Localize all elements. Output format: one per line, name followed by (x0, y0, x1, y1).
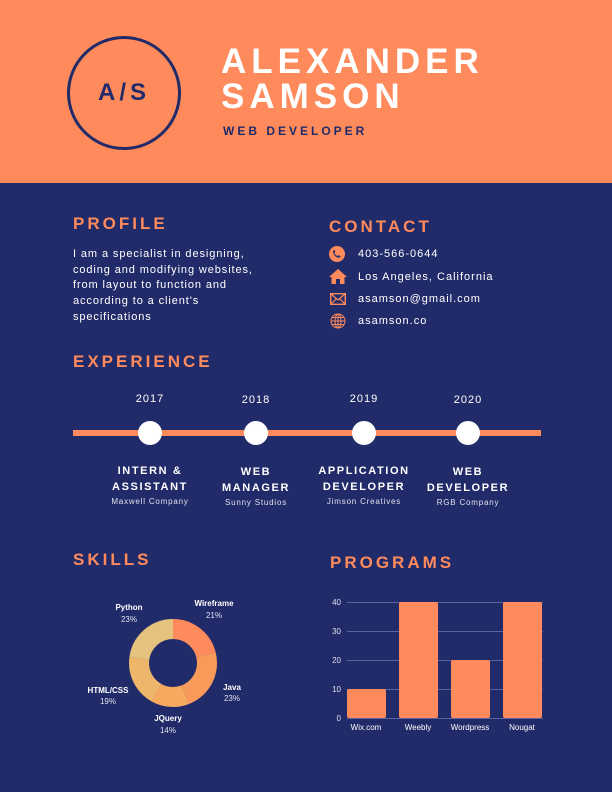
timeline (73, 393, 541, 507)
timeline: 2018 (242, 394, 270, 406)
contact list: asamson.co (358, 315, 427, 327)
bar chart: 20 (332, 656, 342, 665)
donut chart: HTML/CSS (88, 686, 129, 695)
job: web manager: MANAGER (222, 482, 290, 494)
donut chart: Python (115, 603, 143, 612)
job: web manager (222, 466, 290, 507)
profile text: specifications (73, 311, 152, 323)
monogram circle (67, 36, 181, 150)
icon: house (329, 269, 347, 284)
contact list (329, 246, 494, 328)
name title (221, 42, 484, 116)
job title: WEB DEVELOPER (223, 124, 367, 138)
name title: SAMSON (221, 77, 405, 116)
donut chart: Java (223, 683, 241, 692)
job: web developer: WEB (453, 466, 483, 478)
timeline: 2019 (350, 393, 378, 405)
donut chart: 23% (121, 615, 137, 624)
year labels: 2017 (136, 393, 164, 405)
job: intern: INTERN & (118, 465, 182, 477)
icon: envelope (330, 293, 346, 305)
bar chart: 0 (337, 714, 342, 723)
bar chart: 10 (332, 685, 342, 694)
bar chart: 30 (332, 627, 342, 636)
profile text: according to a client's (73, 295, 199, 307)
bar chart: Nougat (509, 723, 536, 732)
donut chart: 21% (206, 611, 222, 620)
bar chart: Wix.com (351, 723, 382, 732)
donut chart: 19% (100, 697, 116, 706)
milestone dots (138, 421, 162, 445)
donut chart: 23% (224, 694, 240, 703)
donut chart: Wireframe (194, 599, 234, 608)
job: intern: ASSISTANT (112, 481, 188, 493)
bar chart: 40 (332, 598, 342, 607)
profile text: I am a specialist in designing, (73, 248, 245, 260)
profile text: from layout to function and (73, 279, 227, 291)
profile text: coding and modifying websites, (73, 264, 253, 276)
job: application developer: Jimson Creatives (327, 497, 401, 506)
experience heading: EXPERIENCE (73, 352, 213, 371)
profile text (73, 248, 253, 323)
donut chart: JQuery (154, 714, 182, 723)
job: web developer: DEVELOPER (427, 482, 509, 494)
bar chart (332, 598, 543, 732)
timeline: 2020 (454, 394, 482, 406)
job: application developer: APPLICATION (318, 465, 410, 477)
job: web manager: WEB (241, 466, 271, 478)
donut chart: 14% (160, 726, 176, 735)
contact heading: CONTACT (329, 217, 432, 236)
contact list: Los Angeles, California (358, 271, 494, 283)
header band (0, 0, 612, 183)
contact list: asamson@gmail.com (358, 293, 481, 305)
profile heading: PROFILE (73, 214, 168, 233)
monogram circle: A/S (98, 79, 150, 106)
icon: phone (329, 246, 345, 262)
job: web manager: Sunny Studios (225, 498, 287, 507)
job: intern: Maxwell Company (111, 497, 189, 506)
programs heading: PROGRAMS (330, 553, 454, 572)
name title: ALEXANDER (221, 42, 484, 81)
icon: globe (330, 314, 346, 328)
bar chart: Weebly (405, 723, 431, 732)
contact list: 403-566-0644 (358, 248, 439, 260)
job: web developer (427, 466, 509, 507)
job: application developer (318, 465, 410, 506)
job: application developer: DEVELOPER (323, 481, 405, 493)
bar chart: Wordpress (451, 723, 489, 732)
timeline bar (73, 430, 541, 436)
job: intern (111, 465, 189, 506)
donut chart (88, 599, 241, 735)
skills heading: SKILLS (73, 550, 151, 569)
job: web developer: RGB Company (437, 498, 499, 507)
